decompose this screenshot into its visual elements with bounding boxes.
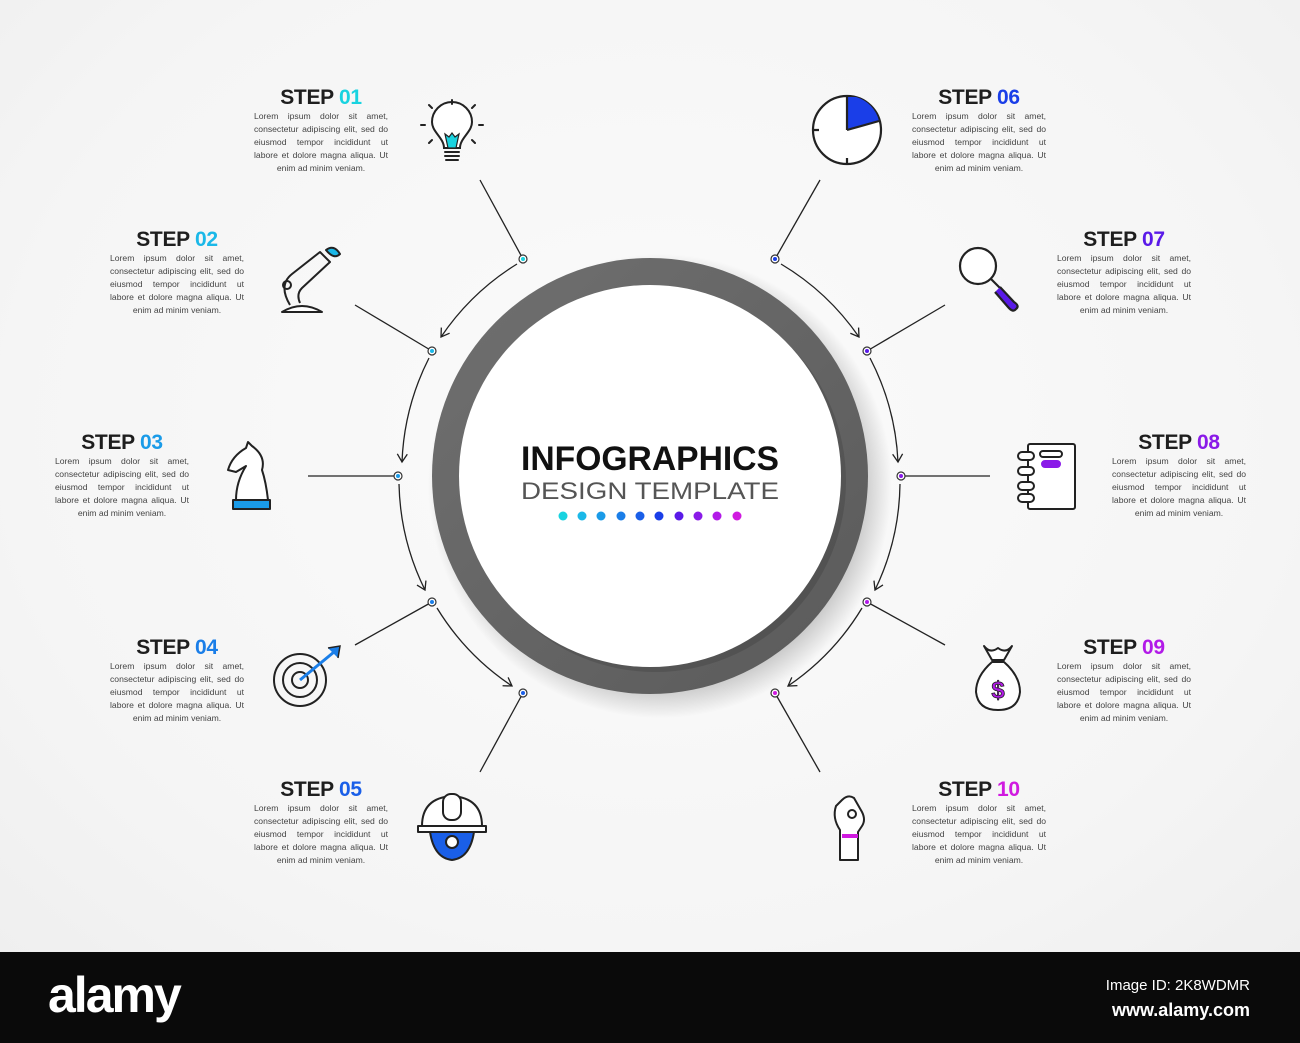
step 08: STEP 08 xyxy=(1138,431,1220,454)
icon: notebook xyxy=(1018,444,1075,509)
step 09: Lorem ipsum dolor sit amet, consectetur adipiscing elit, sed do eiusmod tempor incididunt ut labore et dolore magna aliqua. Ut enim ad minim veniam. xyxy=(1057,661,1191,723)
color dots xyxy=(558,512,742,520)
footer text: www.alamy.com xyxy=(1112,1000,1250,1020)
step 01: STEP 01 xyxy=(280,86,362,109)
icon: money bag xyxy=(976,646,1020,710)
step 02: STEP 02 xyxy=(136,228,218,251)
step 03: Lorem ipsum dolor sit amet, consectetur adipiscing elit, sed do eiusmod tempor incididunt ut labore et dolore magna aliqua. Ut enim ad minim veniam. xyxy=(55,456,189,518)
step 04: STEP 04 xyxy=(136,636,218,659)
icon: target xyxy=(274,646,340,706)
icon: knight xyxy=(228,442,270,509)
step 06: Lorem ipsum dolor sit amet, consectetur adipiscing elit, sed do eiusmod tempor incididunt ut labore et dolore magna aliqua. Ut enim ad minim veniam. xyxy=(912,111,1046,173)
step 04: Lorem ipsum dolor sit amet, consectetur adipiscing elit, sed do eiusmod tempor incididunt ut labore et dolore magna aliqua. Ut enim ad minim veniam. xyxy=(110,661,244,723)
footer text xyxy=(1106,977,1250,1020)
icon: magnifier xyxy=(960,248,1018,311)
icon: clock xyxy=(813,96,881,164)
center circle xyxy=(428,254,892,718)
logo: alamy xyxy=(48,967,180,1023)
icon: ok hand xyxy=(835,796,864,860)
icon: bulb xyxy=(421,100,483,160)
step 07: STEP 07 xyxy=(1083,228,1165,251)
step 05: Lorem ipsum dolor sit amet, consectetur adipiscing elit, sed do eiusmod tempor incididunt ut labore et dolore magna aliqua. Ut enim ad minim veniam. xyxy=(254,803,388,865)
step 02: Lorem ipsum dolor sit amet, consectetur adipiscing elit, sed do eiusmod tempor incididunt ut labore et dolore magna aliqua. Ut enim ad minim veniam. xyxy=(110,253,244,315)
step 08: Lorem ipsum dolor sit amet, consectetur adipiscing elit, sed do eiusmod tempor incididunt ut labore et dolore magna aliqua. Ut enim ad minim veniam. xyxy=(1112,456,1246,518)
step 07: Lorem ipsum dolor sit amet, consectetur adipiscing elit, sed do eiusmod tempor incididunt ut labore et dolore magna aliqua. Ut enim ad minim veniam. xyxy=(1057,253,1191,315)
center title: INFOGRAPHICS xyxy=(521,440,779,478)
icon: money bag: $ xyxy=(991,677,1005,704)
step 05: STEP 05 xyxy=(280,778,362,801)
center title xyxy=(521,440,779,505)
connector lines xyxy=(308,180,990,772)
step 09: STEP 09 xyxy=(1083,636,1165,659)
arcs with arrows xyxy=(399,264,900,686)
step 10: Lorem ipsum dolor sit amet, consectetur adipiscing elit, sed do eiusmod tempor incididunt ut labore et dolore magna aliqua. Ut enim ad minim veniam. xyxy=(912,803,1046,865)
footer text: Image ID: 2K8WDMR xyxy=(1106,977,1250,994)
icon: helmet xyxy=(418,794,486,860)
footer bar xyxy=(0,952,1300,1043)
dots xyxy=(394,255,905,697)
icon: microscope xyxy=(282,248,340,312)
center title: DESIGN TEMPLATE xyxy=(521,478,779,505)
step 10: STEP 10 xyxy=(938,778,1020,801)
step 06: STEP 06 xyxy=(938,86,1020,109)
step 03: STEP 03 xyxy=(81,431,163,454)
step 01: Lorem ipsum dolor sit amet, consectetur adipiscing elit, sed do eiusmod tempor incididunt ut labore et dolore magna aliqua. Ut enim ad minim veniam. xyxy=(254,111,388,173)
